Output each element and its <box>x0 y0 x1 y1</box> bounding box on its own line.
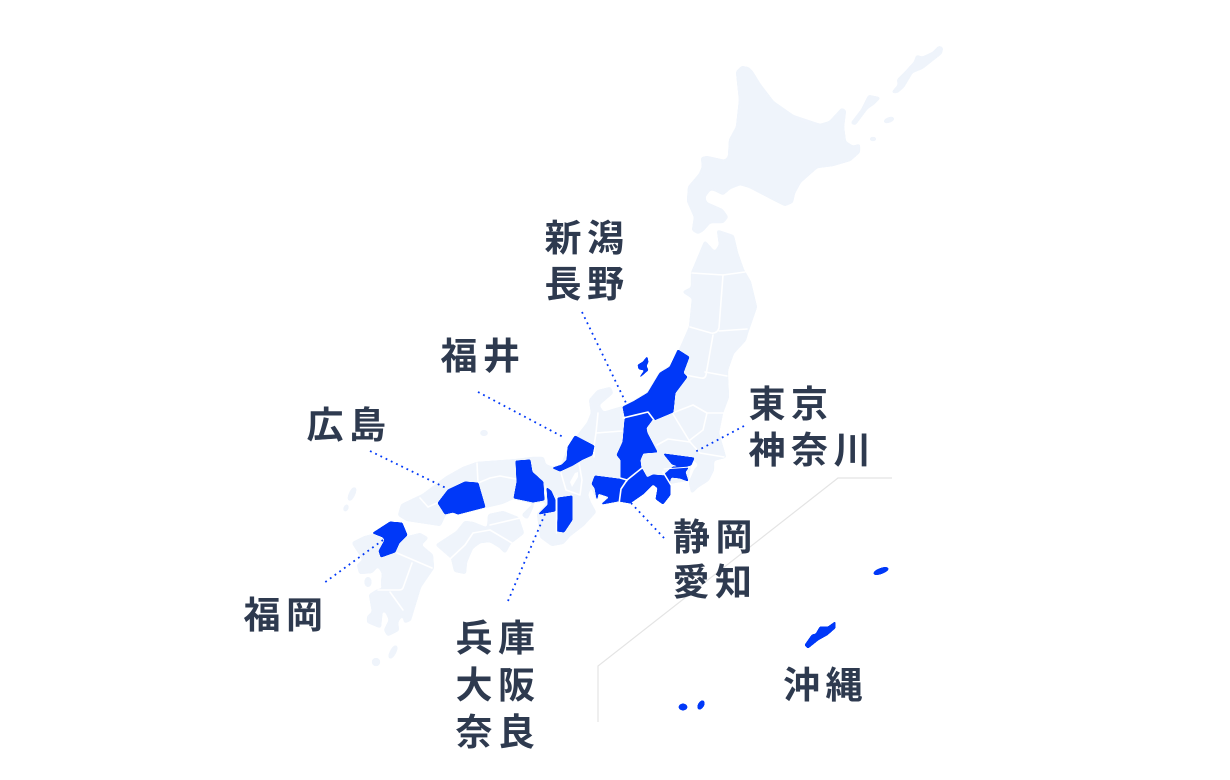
region: Honshu <box>399 231 756 545</box>
prefecture: Hiroshima <box>438 482 485 514</box>
label: Hiroshima: 広島 <box>306 405 392 446</box>
leader lines <box>324 312 744 601</box>
prefecture: Nagano <box>617 413 657 480</box>
label: Niigata, Nagano <box>544 218 630 305</box>
label: Niigata, Nagano: 新潟 <box>544 218 630 259</box>
label: Shizuoka, Aichi: 愛知 <box>672 562 758 603</box>
prefecture: Osaka <box>539 488 555 514</box>
label: Hyogo, Osaka, Nara <box>456 618 540 753</box>
label: Hyogo, Osaka, Nara: 兵庫 <box>456 618 540 659</box>
region: Shikoku <box>437 512 523 573</box>
region: Kuril islands <box>852 47 942 140</box>
label: Tokyo, Kanagawa: 神奈川 <box>748 430 876 471</box>
Lake Biwa <box>570 472 578 487</box>
map: highlighted prefectures <box>373 350 889 710</box>
prefecture: Fukuoka <box>373 522 407 557</box>
prefecture: Shizuoka <box>619 469 670 504</box>
region: Kyushu <box>368 534 433 635</box>
label: Hyogo, Osaka, Nara: 奈良 <box>456 712 540 753</box>
prefecture: Fukui <box>553 436 594 471</box>
label: Fukui: 福井 <box>440 336 526 377</box>
region: Nagasaki <box>353 535 383 573</box>
label: Tokyo, Kanagawa <box>748 384 876 471</box>
label: Fukuoka: 福岡 <box>244 595 328 636</box>
small islands <box>344 431 533 665</box>
label: Tokyo, Kanagawa: 東京 <box>748 384 834 425</box>
Okinawa islands <box>679 566 889 710</box>
label: Niigata, Nagano: 長野 <box>544 264 630 305</box>
label: Okinawa: 沖縄 <box>783 665 868 706</box>
label: Shizuoka, Aichi: 静岡 <box>673 517 758 558</box>
prefecture: Kanagawa <box>665 467 688 483</box>
prefecture: Hyogo <box>514 460 544 502</box>
region: Hokkaido <box>688 67 859 233</box>
label: Hyogo, Osaka, Nara: 大阪 <box>456 665 540 706</box>
prefecture: Niigata <box>623 350 689 420</box>
prefecture borders <box>378 272 747 610</box>
prefecture: Nara <box>557 496 572 532</box>
label: Shizuoka, Aichi <box>672 517 758 603</box>
prefecture: Aichi <box>592 476 626 504</box>
borders between highlighted prefectures <box>546 412 690 533</box>
prefecture: Tokyo <box>664 454 694 467</box>
Okinawa inset frame line <box>598 478 892 722</box>
island: Sado <box>638 357 648 377</box>
map: Japan base <box>344 47 942 665</box>
